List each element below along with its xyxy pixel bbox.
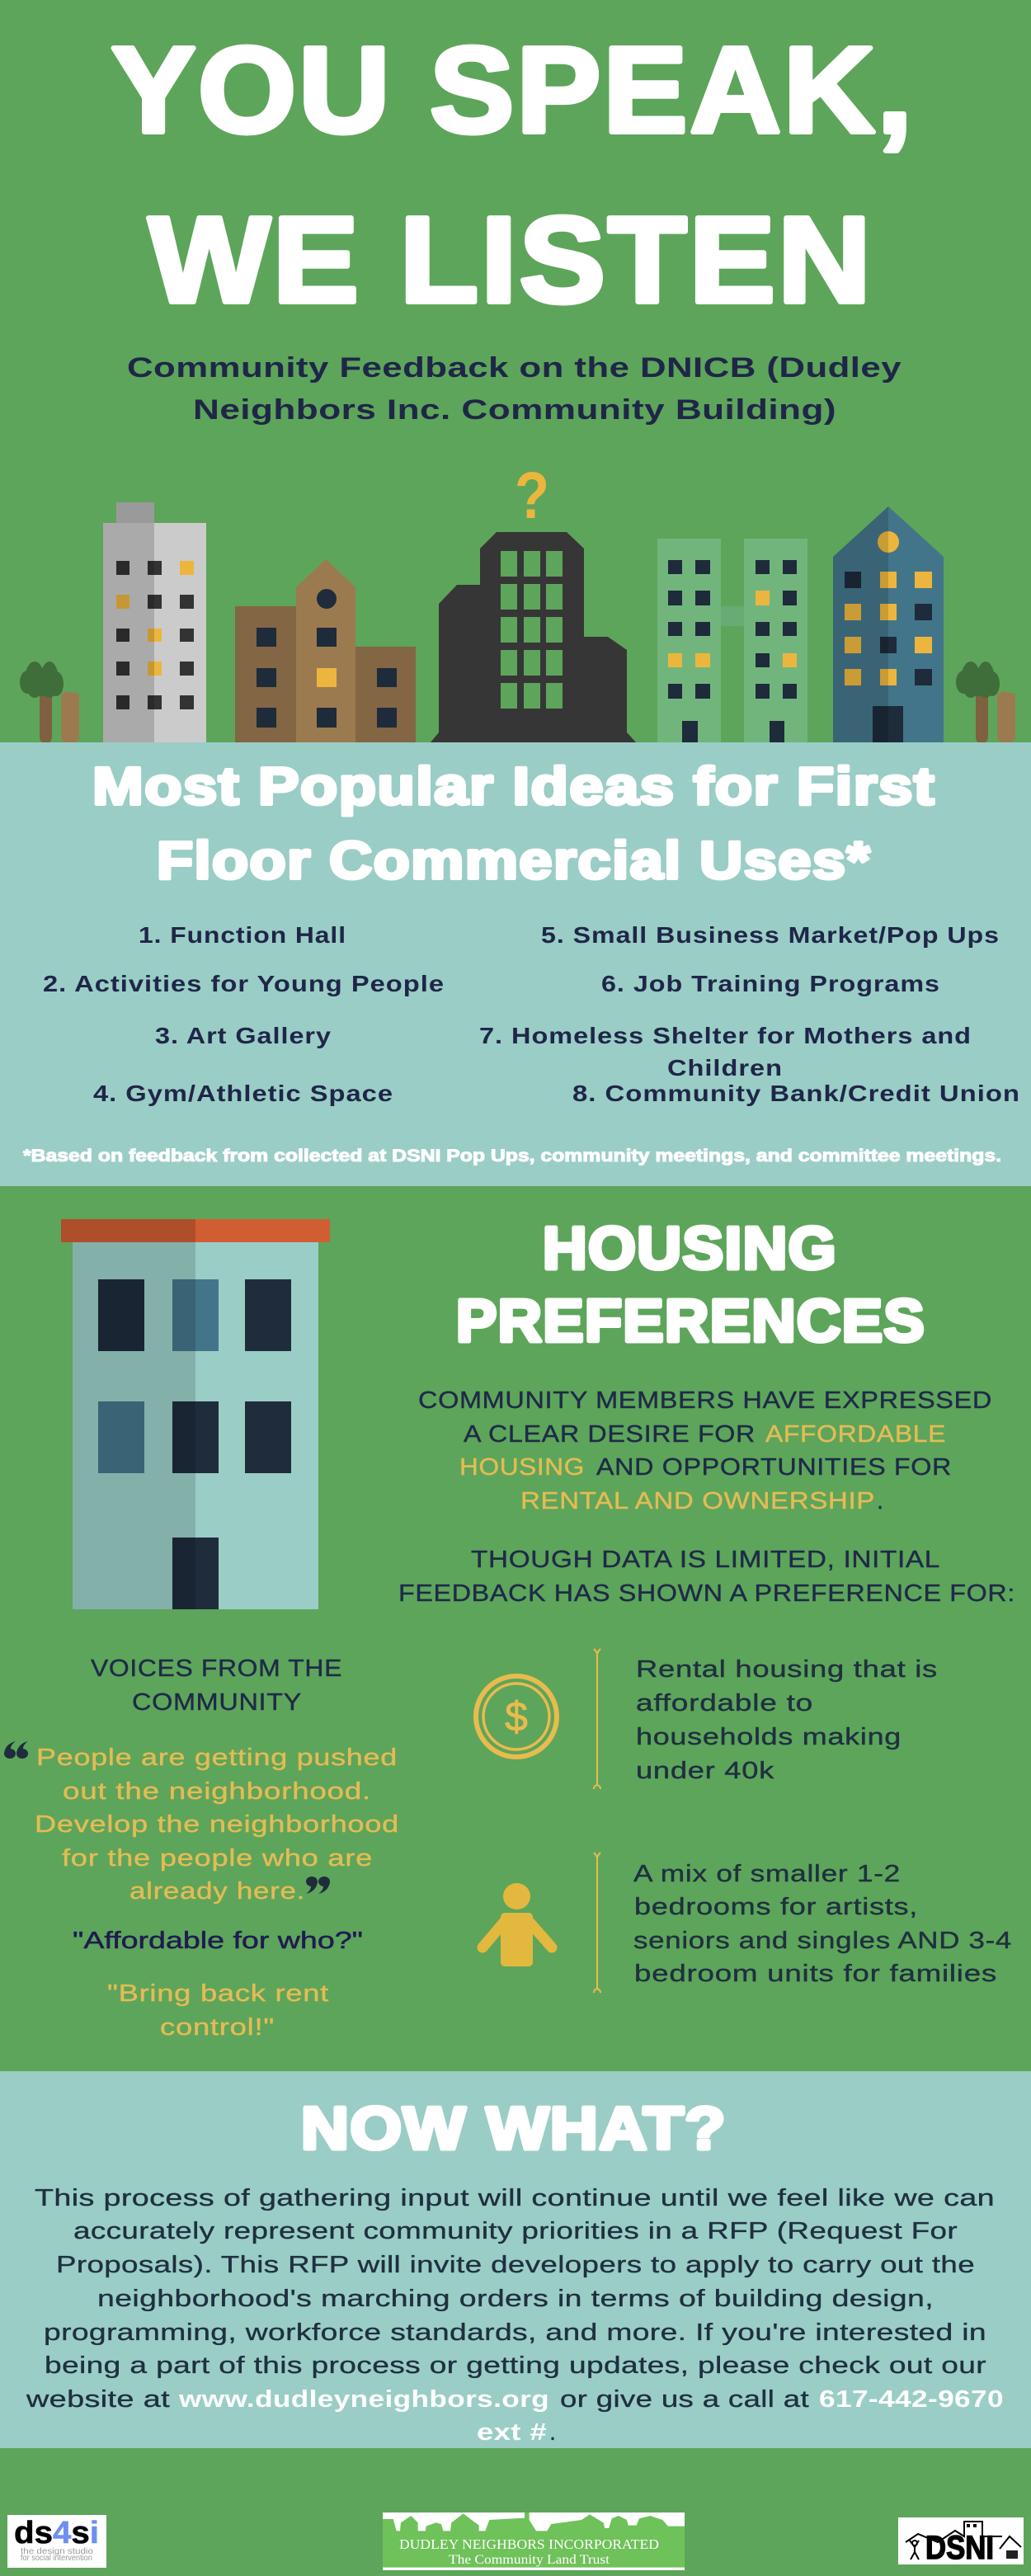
logo: ds4si: the design studio — [21, 2546, 93, 2556]
icon: coin — [476, 1676, 557, 1757]
text: process description: programming, workforce standards, and more. If you're interested in — [44, 2319, 986, 2346]
quote: people pushed out: People are getting pushed — [36, 1745, 398, 1771]
logo: dudley neighbors incorporated — [383, 2512, 685, 2570]
preference: unit mix — [483, 1853, 1012, 1993]
list: commercial uses: 6. Job Training Programs — [601, 971, 940, 996]
list: commercial uses: 3. Art Gallery — [155, 1023, 332, 1048]
text: rental housing — [636, 1656, 938, 1784]
text: process description: This process of gathering input will continue until we feel like we can — [35, 2185, 995, 2211]
text: process description: neighborhood's marching orders in terms of building design, — [97, 2286, 934, 2312]
icon: housing building — [61, 1219, 330, 1609]
icon: right tree — [956, 662, 1015, 743]
text: process description: Proposals). This RFP will invite developers to apply to carry out the — [56, 2252, 975, 2278]
quote: people pushed out: Develop the neighborhood — [35, 1811, 399, 1838]
divider — [594, 1649, 600, 1789]
text: community desire: AND OPPORTUNITIES FOR — [596, 1454, 952, 1481]
text: preference intro — [398, 1547, 1015, 1607]
list: commercial uses: 4. Gym/Athletic Space — [93, 1081, 393, 1106]
list: commercial uses: 1. Function Hall — [139, 922, 346, 948]
icon: brown building — [235, 559, 416, 742]
text: rental housing: affordable to — [636, 1690, 813, 1717]
text: process description: . — [549, 2419, 556, 2446]
logo: dsni — [898, 2517, 1024, 2566]
icon: gray tower — [103, 502, 206, 742]
icon: person — [483, 1883, 552, 1966]
panel: header — [111, 22, 915, 426]
icon: opening quote marks — [4, 1741, 28, 1759]
quote: people pushed out: out the neighborhood. — [63, 1778, 371, 1805]
heading: most popular ideas: Floor Commercial Uses* — [157, 831, 871, 890]
text: process description: or give us a call at — [560, 2386, 809, 2413]
text: process description: www.dudleyneighbors.org — [178, 2386, 549, 2413]
text: community desire: A CLEAR DESIRE FOR — [464, 1421, 756, 1448]
list: commercial uses: 7. Homeless Shelter for Mothers and — [479, 1023, 972, 1048]
logo: ds4si — [7, 2515, 106, 2568]
text: rental housing: Rental housing that is — [636, 1656, 938, 1683]
list: commercial uses: 2. Activities for Young People — [43, 971, 445, 996]
logo: dudley neighbors incorporated: The Community Land Trust — [449, 2553, 610, 2567]
text: process description: ext # — [477, 2419, 547, 2446]
quote: people pushed out — [35, 1745, 399, 1905]
heading: housing preferences: HOUSING — [543, 1216, 837, 1282]
text: community desire: . — [877, 1488, 884, 1514]
subtitle: Neighbors Inc. Community Building) — [193, 394, 836, 426]
icon: light green twin buildings — [657, 539, 807, 743]
divider — [594, 1853, 600, 1993]
icon: question mark: ? — [515, 459, 549, 532]
subtitle: Community Feedback on the DNICB (Dudley — [127, 352, 902, 384]
skyline illustration — [20, 459, 1015, 743]
text: rental housing: households making — [636, 1724, 902, 1750]
footnote: *Based on feedback from collected at DSNI Pop Ups, community meetings, and committee meetings. — [23, 1147, 1001, 1166]
heading: voices from the community: COMMUNITY — [132, 1689, 302, 1716]
text: unit mix — [633, 1861, 1012, 1987]
icon: left tree — [20, 662, 79, 743]
heading: voices from the community: VOICES FROM THE — [91, 1655, 342, 1682]
quote: rent control: "Bring back rent — [107, 1980, 329, 2007]
panel: now what — [0, 2071, 1031, 2448]
text: rental housing: under 40k — [636, 1758, 774, 1784]
text: community desire: RENTAL AND OWNERSHIP — [520, 1488, 875, 1514]
text: community desire: COMMUNITY MEMBERS HAVE EXPRESSED — [418, 1387, 992, 1414]
quote: people pushed out: for the people who are — [62, 1845, 373, 1872]
text: unit mix: A mix of smaller 1-2 — [633, 1861, 901, 1887]
logo: ds4si: ds4si — [14, 2516, 99, 2550]
text: preference intro: FEEDBACK HAS SHOWN A PREFERENCE FOR: — [398, 1580, 1015, 1607]
list: commercial uses: Children — [667, 1055, 783, 1081]
heading: most popular ideas: Most Popular Ideas for First — [92, 756, 935, 816]
list: commercial uses: 8. Community Bank/Credit Union — [572, 1081, 1020, 1106]
icon: closing quote marks — [306, 1877, 330, 1894]
title: YOU SPEAK, — [111, 22, 915, 158]
text: unit mix: bedroom units for families — [634, 1961, 997, 1987]
text: community desire: HOUSING — [459, 1454, 585, 1481]
heading: housing preferences — [456, 1216, 925, 1354]
heading: most popular ideas — [92, 756, 935, 890]
title — [111, 22, 915, 328]
list: commercial uses — [43, 922, 1020, 1106]
list: commercial uses: 5. Small Business Market/Pop Ups — [541, 922, 1000, 948]
text: preference intro: THOUGH DATA IS LIMITED, INITIAL — [471, 1547, 940, 1573]
text: process description: accurately represent community priorities in a RFP (Request For — [73, 2218, 958, 2244]
quote: rent control — [107, 1980, 329, 2041]
icon: dark central building — [431, 532, 636, 742]
text: process description: being a part of this process or getting updates, please check out our — [45, 2352, 986, 2379]
text: process description: website at — [26, 2386, 170, 2413]
text: process description — [26, 2185, 1004, 2446]
text: unit mix: bedrooms for artists, — [634, 1894, 918, 1920]
subtitle — [127, 352, 902, 426]
panel: most popular ideas — [0, 742, 1031, 1186]
quote: rent control: control!" — [160, 2014, 275, 2041]
icon: coin: $ — [505, 1693, 528, 1740]
heading: now what: NOW WHAT? — [301, 2096, 727, 2162]
heading: voices from the community — [91, 1655, 342, 1716]
text: process description: 617-442-9670 — [819, 2386, 1004, 2413]
logo: ds4si: for social intervention — [21, 2554, 92, 2563]
text: community desire — [418, 1387, 992, 1514]
panel: housing preferences — [4, 1216, 1015, 2041]
quote: people pushed out: already here. — [129, 1878, 305, 1905]
heading: housing preferences: PREFERENCES — [456, 1288, 925, 1354]
icon: blue building — [833, 506, 944, 742]
quote: affordable for who: "Affordable for who?" — [73, 1928, 363, 1954]
preference: rental housing — [476, 1649, 938, 1789]
logo: dsni: DSNI — [925, 2530, 994, 2566]
text: community desire: AFFORDABLE — [765, 1421, 946, 1448]
text: unit mix: seniors and singles AND 3-4 — [633, 1928, 1012, 1954]
logo: dudley neighbors incorporated: DUDLEY NEIGHBORS INCORPORATED — [399, 2536, 659, 2552]
title: WE LISTEN — [148, 192, 873, 328]
